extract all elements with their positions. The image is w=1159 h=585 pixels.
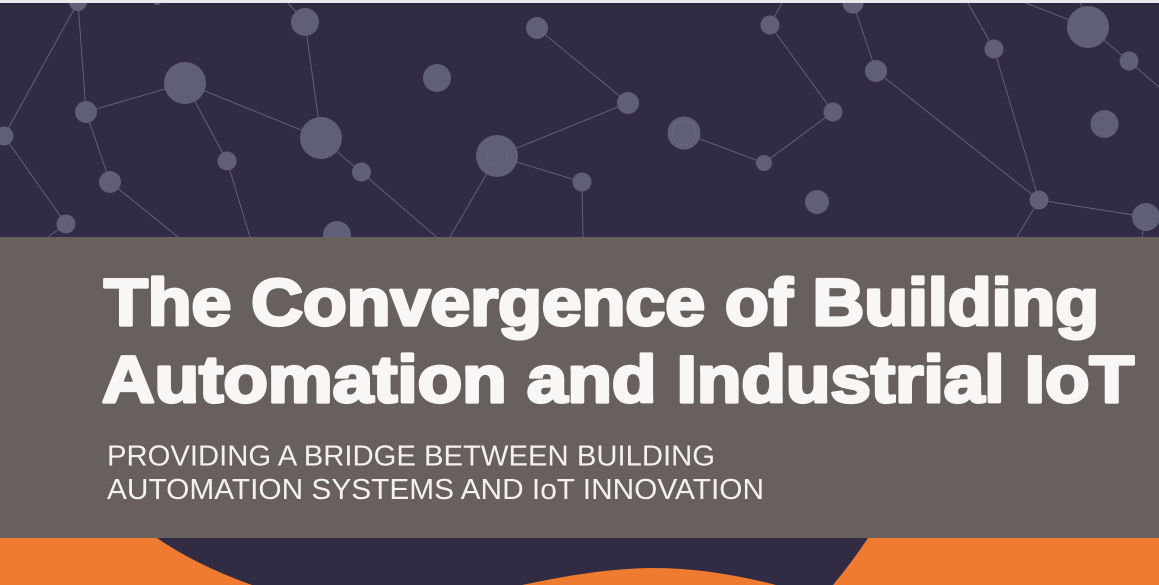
panel: title band <box>0 237 1159 538</box>
orange wave bump <box>522 568 776 585</box>
subtitle <box>107 440 764 506</box>
panel: bottom orange band with wave shapes <box>0 538 1159 585</box>
subtitle: PROVIDING A BRIDGE BETWEEN BUILDING <box>107 440 715 472</box>
subtitle: AUTOMATION SYSTEMS AND IoT INNOVATION <box>107 474 764 506</box>
title: Automation and Industrial IoT <box>102 342 1134 416</box>
network graphic <box>0 0 1159 249</box>
dark wave shape <box>157 538 868 585</box>
title: The Convergence of Building <box>104 265 1099 339</box>
panel: top network background <box>0 0 1159 249</box>
title <box>102 265 1134 416</box>
